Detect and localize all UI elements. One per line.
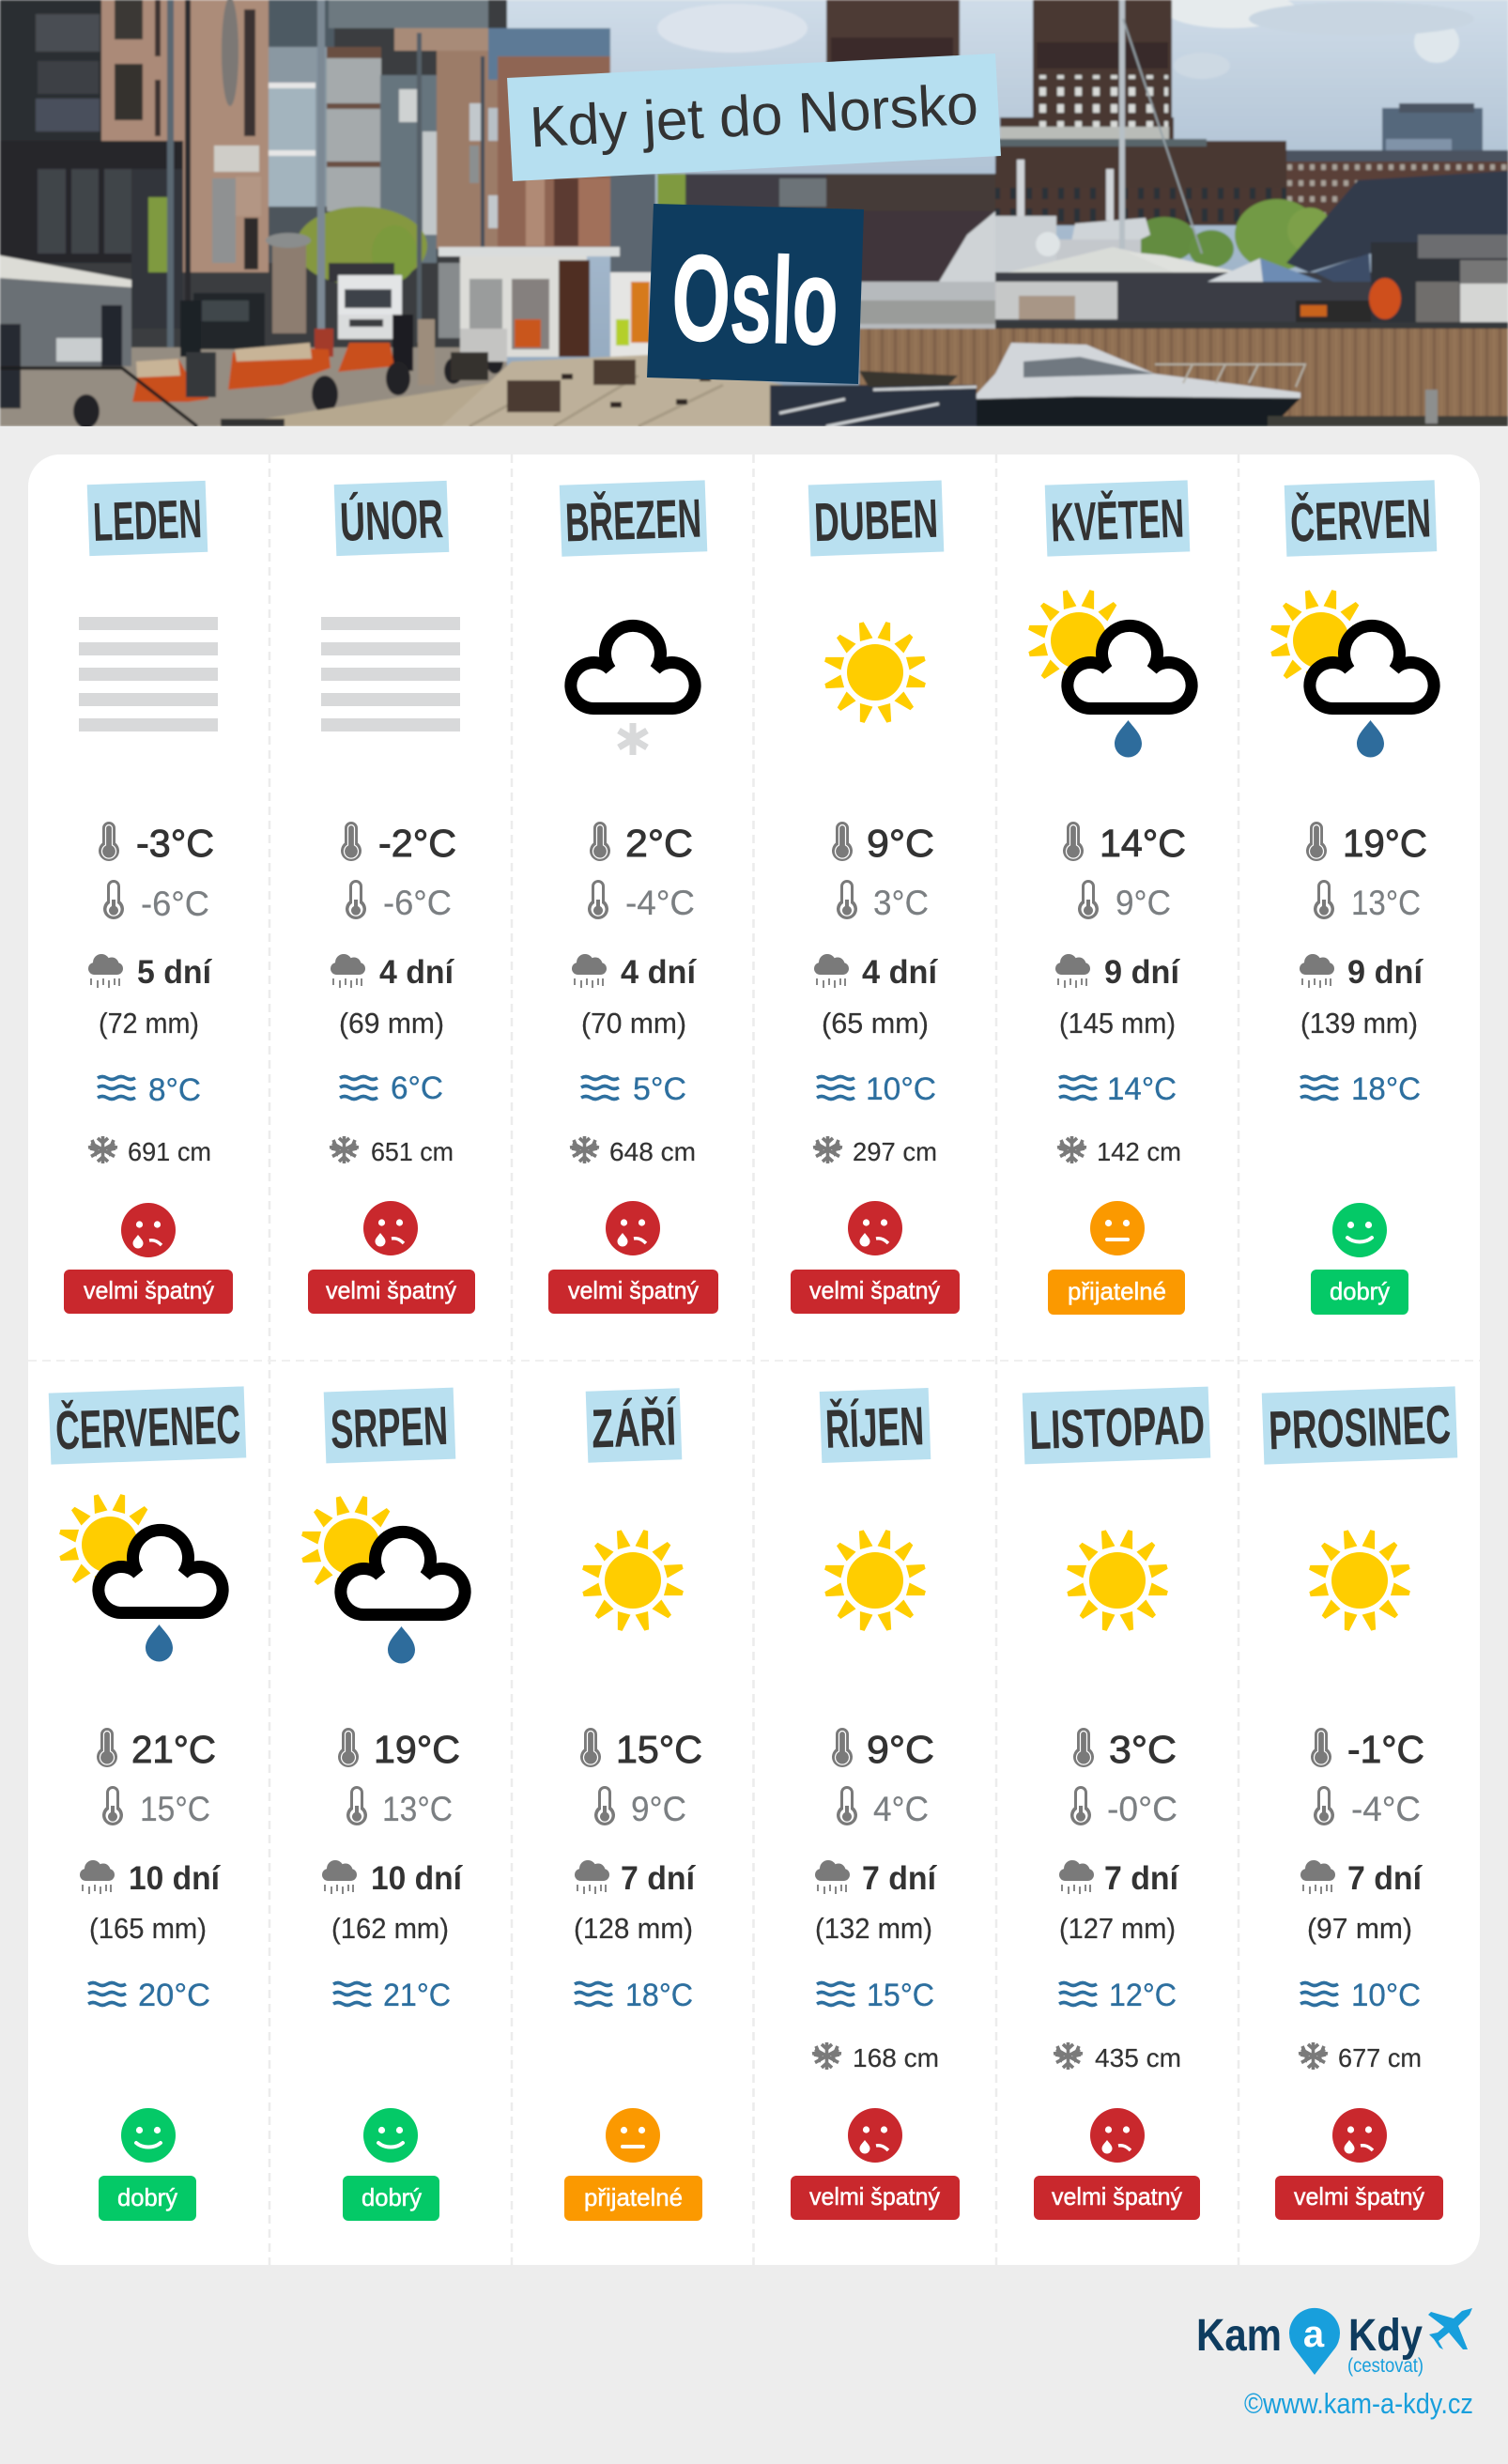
panel: SRPEN: [300, 1388, 465, 2221]
sea temperature: 10°C: [1351, 1978, 1421, 2013]
icon: cloud with snow: [571, 625, 695, 755]
max temperature: 15°C: [616, 1728, 702, 1771]
rating: velmi špatný: velmi špatný: [568, 1276, 699, 1304]
precipitation: (69 mm): [339, 1007, 444, 1040]
rating: velmi špatný: velmi špatný: [809, 1276, 940, 1304]
min temperature: 9°C: [631, 1790, 686, 1828]
rainy days: 9 dní: [1104, 954, 1180, 991]
min temperature: [1314, 880, 1421, 922]
rating: velmi špatný: [64, 1203, 233, 1314]
max temperature: 9°C: [867, 1728, 934, 1771]
max temperature: [99, 822, 214, 865]
rainy days: 4 dní: [862, 954, 938, 991]
precipitation: (127 mm): [1059, 1912, 1176, 1945]
min temperature: [346, 880, 452, 922]
snow depth: [1057, 1136, 1181, 1166]
snow depth: [813, 1136, 937, 1166]
snow depth: 691 cm: [128, 1137, 211, 1166]
month label: ŘÍJEN: [824, 1395, 925, 1460]
sea temperature: 10°C: [866, 1071, 936, 1107]
month label: LISTOPAD: [1028, 1394, 1206, 1461]
max temperature: [341, 822, 456, 865]
rainy days: 7 dní: [862, 1860, 937, 1897]
sea temperature: 6°C: [391, 1070, 443, 1106]
sea temperature: [575, 1978, 693, 2013]
sea temperature: [817, 1978, 934, 2013]
precipitation: (65 mm): [822, 1007, 929, 1040]
header photo: Oslo harbour: [0, 0, 1508, 428]
rainy days: 4 dní: [621, 954, 697, 991]
rainy days: 9 dní: [1347, 954, 1423, 991]
precipitation: (165 mm): [89, 1912, 207, 1945]
month label: [324, 1388, 455, 1463]
rating: velmi špatný: [791, 1201, 960, 1314]
min temperature: [1078, 880, 1171, 922]
sea temperature: [1059, 1978, 1177, 2013]
rainy days: [572, 954, 697, 991]
max temperature: [1306, 822, 1427, 865]
sea temperature: [1300, 1071, 1421, 1107]
month label: [87, 481, 208, 556]
min temperature: [102, 1786, 210, 1828]
month label: [1045, 480, 1190, 557]
rating: přijatelné: přijatelné: [1068, 1277, 1166, 1305]
logo: Kam a Kdy: (cestovat): [1347, 2355, 1423, 2377]
precipitation: (145 mm): [1059, 1007, 1176, 1040]
panel: LEDEN: [64, 481, 233, 1314]
max temperature: 2°C: [625, 822, 693, 865]
rating: dobrý: [1311, 1203, 1408, 1315]
month label: ÚNOR: [339, 488, 444, 553]
panel: PROSINEC: [1262, 1386, 1457, 2220]
precipitation: (162 mm): [331, 1912, 449, 1945]
rainy days: 7 dní: [1347, 1860, 1423, 1897]
min temperature: [837, 1786, 929, 1828]
min temperature: 4°C: [873, 1790, 929, 1828]
rainy days: [1055, 954, 1180, 991]
logo: Kam a Kdy: Kdy: [1348, 2311, 1423, 2361]
max temperature: [832, 1728, 934, 1771]
sea temperature: 5°C: [633, 1071, 686, 1107]
min temperature: 15°C: [140, 1790, 210, 1828]
rating: dobrý: [99, 2108, 196, 2221]
rating: dobrý: dobrý: [1330, 1277, 1390, 1305]
sea temperature: [98, 1072, 201, 1108]
sea temperature: [88, 1978, 210, 2013]
sea temperature: [1059, 1071, 1177, 1107]
icon: map pin: a: [1303, 2314, 1325, 2355]
month label: SRPEN: [330, 1395, 449, 1460]
icon: sun, cloud and rain: [300, 1495, 465, 1664]
icon: sun: [1066, 1529, 1169, 1632]
min temperature: [594, 1786, 686, 1828]
min temperature: [103, 880, 209, 923]
snow depth: [812, 2042, 939, 2072]
rainy days: [331, 954, 454, 991]
min temperature: [588, 880, 695, 922]
snow depth: [570, 1136, 696, 1166]
rainy days: [814, 954, 938, 991]
max temperature: 3°C: [1109, 1728, 1177, 1771]
rainy days: [88, 954, 212, 991]
rainy days: 10 dní: [129, 1860, 221, 1897]
rainy days: [80, 1860, 221, 1897]
max temperature: 14°C: [1100, 822, 1186, 865]
min temperature: 13°C: [382, 1790, 453, 1828]
sea temperature: [581, 1071, 686, 1107]
panel: ÚNOR: [308, 481, 475, 1314]
month label: [49, 1386, 246, 1465]
month label: LEDEN: [92, 488, 203, 553]
sea temperature: 21°C: [383, 1978, 451, 2013]
rainy days: [1300, 1860, 1423, 1897]
city label: Oslo: Oslo: [670, 228, 840, 371]
precipitation: (128 mm): [574, 1912, 693, 1945]
max temperature: 19°C: [374, 1728, 460, 1771]
rating: velmi špatný: [1275, 2108, 1443, 2220]
rainy days: [815, 1860, 937, 1897]
rating: velmi špatný: [548, 1201, 718, 1314]
panel: ČERVENEC: [49, 1386, 246, 2221]
icon: sun: [823, 621, 927, 724]
month label: BŘEZEN: [564, 488, 702, 554]
min temperature: 3°C: [873, 884, 929, 922]
sea temperature: [1300, 1978, 1421, 2013]
icon: sun, cloud and rain: [1269, 589, 1434, 757]
precipitation: (70 mm): [581, 1007, 686, 1040]
max temperature: 19°C: [1343, 822, 1427, 865]
rainy days: 5 dní: [137, 954, 212, 991]
rainy days: [322, 1860, 463, 1897]
icon: fog: [79, 617, 218, 732]
rating: velmi špatný: velmi špatný: [326, 1276, 456, 1304]
precipitation: (139 mm): [1300, 1007, 1418, 1040]
min temperature: [1070, 1786, 1177, 1828]
rating: přijatelné: [564, 2108, 702, 2221]
logo: Kam a Kdy: [1196, 2308, 1472, 2377]
rainy days: [1059, 1860, 1179, 1897]
snow depth: 297 cm: [853, 1137, 937, 1166]
rating: velmi špatný: velmi špatný: [1052, 2182, 1182, 2210]
logo: Kam a Kdy: Kam: [1196, 2311, 1282, 2361]
min temperature: -4°C: [625, 884, 695, 922]
snow depth: 435 cm: [1095, 2043, 1181, 2072]
rainy days: [1300, 954, 1423, 991]
month label: [1285, 480, 1437, 557]
precipitation: (97 mm): [1307, 1912, 1412, 1945]
month label: ČERVENEC: [54, 1394, 241, 1461]
rating: velmi špatný: [308, 1201, 475, 1314]
max temperature: [97, 1728, 216, 1771]
sea temperature: [817, 1071, 936, 1107]
rainy days: 10 dní: [371, 1860, 463, 1897]
max temperature: [832, 822, 934, 865]
panel: ŘÍJEN: [791, 1388, 960, 2220]
icon: sun, cloud and rain: [1027, 589, 1192, 757]
rainy days: [575, 1860, 696, 1897]
max temperature: -3°C: [136, 822, 214, 865]
snow depth: 168 cm: [853, 2043, 939, 2072]
max temperature: 21°C: [131, 1728, 216, 1771]
snow depth: 142 cm: [1097, 1137, 1181, 1166]
month label: [820, 1388, 931, 1463]
rating: dobrý: [343, 2108, 439, 2221]
panel: KVĚTEN: [1027, 480, 1192, 1315]
snow depth: 677 cm: [1338, 2043, 1422, 2072]
max temperature: [1063, 822, 1186, 865]
month label: [560, 480, 707, 557]
rating: velmi špatný: [791, 2108, 960, 2220]
snow depth: 648 cm: [609, 1137, 696, 1166]
rating: velmi špatný: velmi špatný: [84, 1276, 214, 1304]
month label: ZÁŘÍ: [591, 1395, 678, 1460]
month label: DUBEN: [813, 488, 939, 553]
panel: ČERVEN: [1269, 480, 1437, 1315]
snow depth: [330, 1136, 454, 1166]
rating: dobrý: dobrý: [117, 2183, 177, 2211]
website credit: ©www.kam-a-kdy.cz: [1244, 2387, 1473, 2420]
sea temperature: [340, 1070, 443, 1106]
min temperature: [1314, 1786, 1421, 1828]
min temperature: 9°C: [1116, 884, 1171, 922]
panel: LISTOPAD: [1023, 1387, 1210, 2220]
sea temperature: 18°C: [625, 1978, 693, 2013]
sea temperature: [333, 1978, 451, 2013]
precipitation: (132 mm): [815, 1912, 932, 1945]
rating: přijatelné: [1048, 1201, 1185, 1315]
month label: [586, 1388, 682, 1463]
rating: dobrý: dobrý: [362, 2183, 422, 2211]
min temperature: [346, 1786, 453, 1828]
sea temperature: 14°C: [1107, 1071, 1177, 1107]
snow depth: [88, 1136, 211, 1166]
sea temperature: 15°C: [867, 1978, 934, 2013]
min temperature: 13°C: [1351, 884, 1421, 922]
max temperature: [1073, 1728, 1177, 1771]
rating: velmi špatný: velmi špatný: [809, 2182, 940, 2210]
max temperature: [1311, 1728, 1424, 1771]
icon: sun, cloud and rain: [58, 1493, 223, 1662]
month label: [808, 481, 944, 556]
max temperature: [590, 822, 693, 865]
panel: ZÁŘÍ: [564, 1388, 702, 2221]
title banner: [507, 54, 1001, 181]
max temperature: -2°C: [378, 822, 456, 865]
precipitation: (72 mm): [99, 1007, 199, 1040]
sea temperature: 8°C: [148, 1072, 201, 1108]
max temperature: 9°C: [867, 822, 934, 865]
panel: DUBEN: [791, 481, 960, 1314]
month label: [1023, 1387, 1210, 1464]
sea temperature: 20°C: [138, 1978, 210, 2013]
snow depth: [1054, 2042, 1181, 2072]
min temperature: -6°C: [383, 884, 452, 922]
min temperature: [837, 880, 929, 922]
icon: fog: [321, 617, 460, 732]
icon: airplane: [1428, 2308, 1472, 2349]
icon: sun: [1308, 1529, 1411, 1632]
icon: sun: [823, 1529, 927, 1632]
rating: velmi špatný: velmi špatný: [1294, 2182, 1424, 2210]
rainy days: 7 dní: [621, 1860, 696, 1897]
rating: velmi špatný: [1034, 2108, 1200, 2220]
icon: sun: [581, 1529, 685, 1632]
rainy days: 4 dní: [379, 954, 454, 991]
title banner: Kdy jet do Norsko: [528, 72, 979, 159]
icon: map pin: [1289, 2308, 1340, 2375]
panel: BŘEZEN: [548, 480, 718, 1314]
city label: Oslo: [647, 204, 864, 384]
month label: KVĚTEN: [1050, 488, 1185, 553]
month label: [334, 481, 449, 556]
panel: monthly climate table: [28, 454, 1480, 2265]
min temperature: -6°C: [141, 885, 209, 923]
snow depth: [1299, 2042, 1422, 2072]
rating: přijatelné: přijatelné: [584, 2183, 683, 2211]
sea temperature: 12°C: [1109, 1978, 1177, 2013]
sea temperature: 18°C: [1351, 1071, 1421, 1107]
min temperature: -4°C: [1351, 1790, 1421, 1828]
rainy days: 7 dní: [1104, 1860, 1179, 1897]
max temperature: -1°C: [1347, 1728, 1424, 1771]
snow depth: 651 cm: [371, 1137, 454, 1166]
min temperature: -0°C: [1107, 1790, 1177, 1828]
